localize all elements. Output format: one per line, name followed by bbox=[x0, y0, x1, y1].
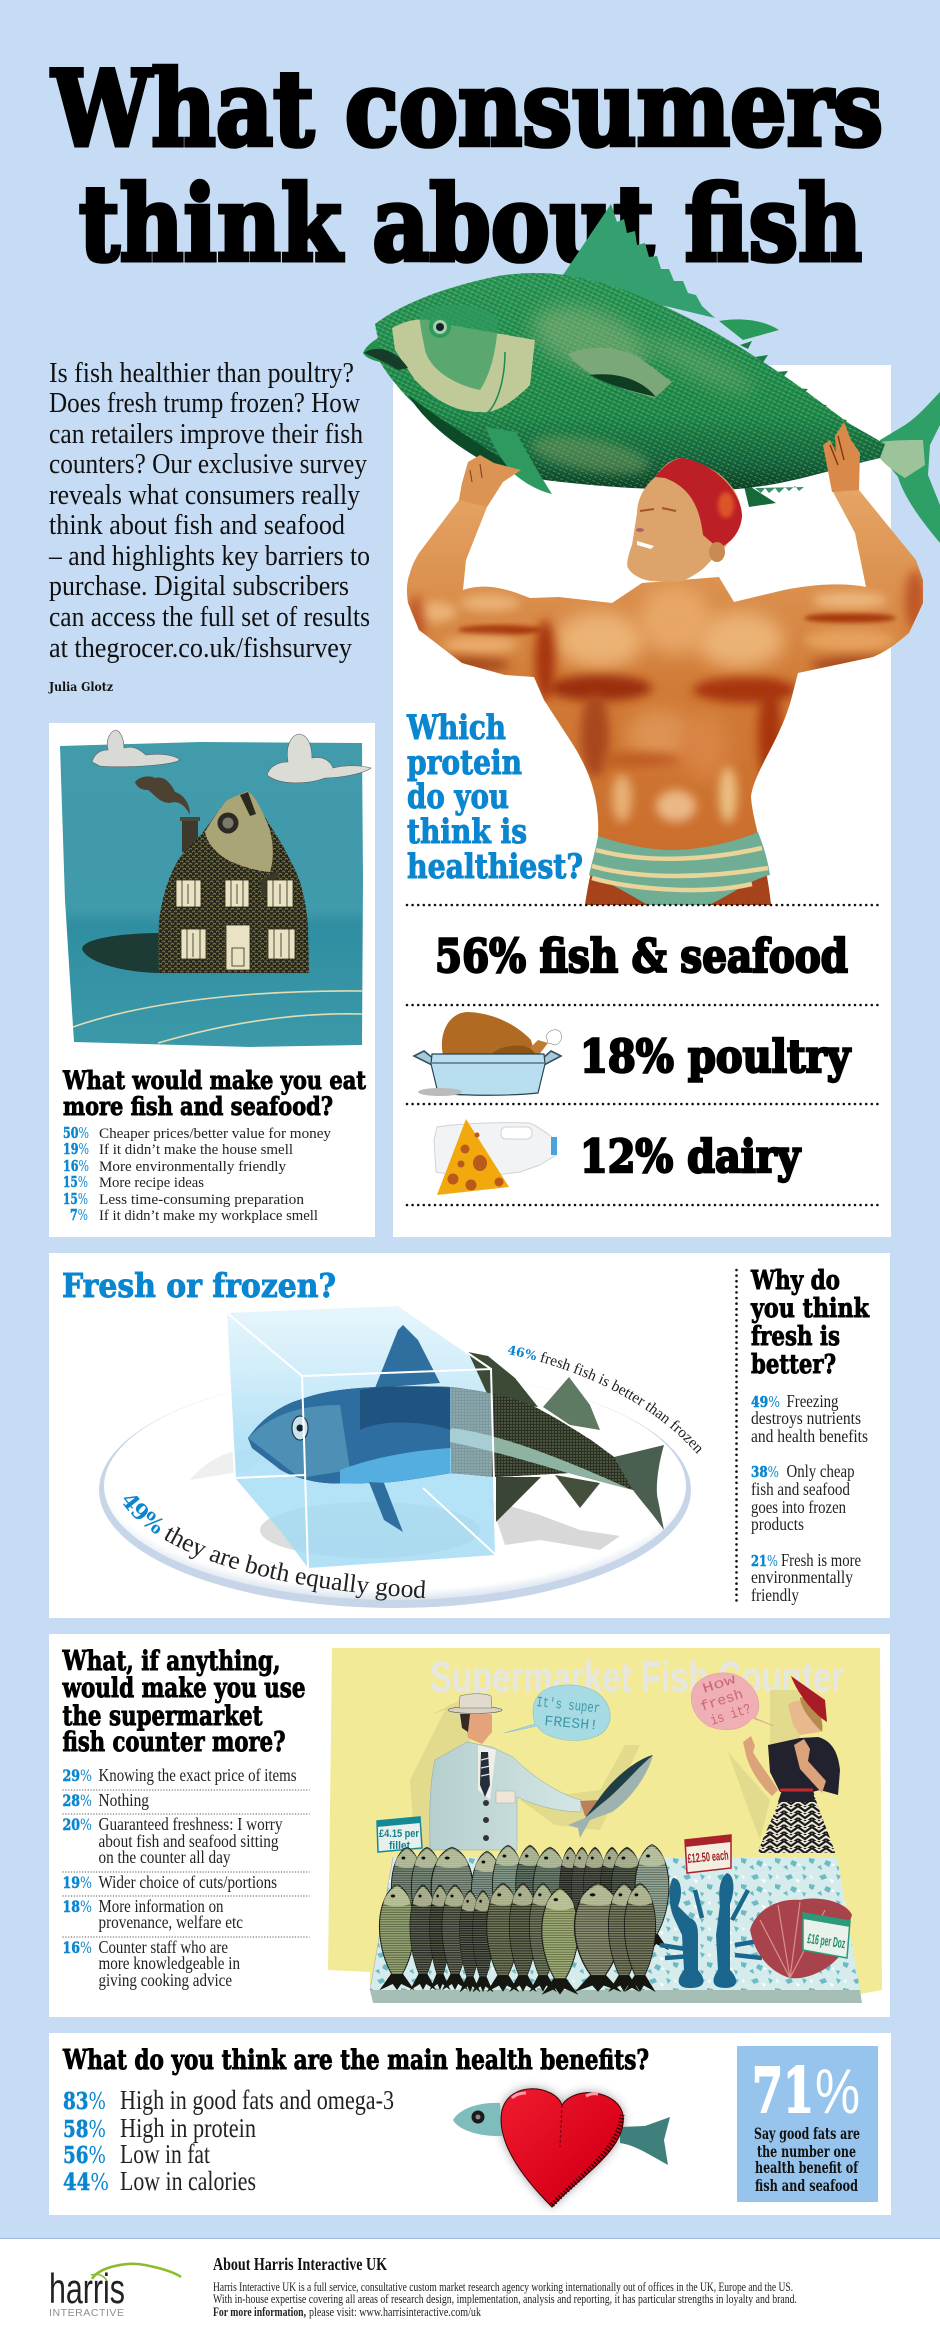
list: health benefits: Low in fat bbox=[120, 2139, 210, 2169]
text: about Harris: With in-house expertise covering all areas of research design, implementation, analysis and reporting, it has particular strengths in loyalty and brand. bbox=[213, 2292, 797, 2306]
list: why fresh is better: 49% bbox=[751, 1393, 780, 1411]
heading: fish counter: would make you use bbox=[62, 1673, 306, 1704]
callout: 71%: 71 bbox=[752, 2054, 814, 2127]
heading: why fresh better bbox=[750, 1265, 870, 1380]
heading: which protein: Which bbox=[406, 708, 506, 748]
list: why fresh is better: friendly bbox=[751, 1585, 799, 1605]
list: reasons to eat more: 16% bbox=[63, 1157, 89, 1175]
heading: health benefits: What do you think are the main health benefits? bbox=[62, 2045, 649, 2076]
illustration: plate with fish in ice bbox=[99, 1305, 691, 1608]
ice tray bbox=[370, 1857, 862, 2003]
list: reasons to eat more bbox=[63, 1124, 331, 1224]
heading: which protein: do you bbox=[407, 777, 509, 817]
heading: about Harris: About Harris Interactive UK bbox=[213, 2254, 387, 2274]
list: why fresh is better: Only cheap bbox=[786, 1461, 855, 1481]
list: fish counter answers: provenance, welfare etc bbox=[98, 1912, 243, 1932]
speech bubble: shopper: fresh bbox=[699, 1687, 745, 1716]
dotted divider bbox=[735, 1270, 738, 1602]
price tag: fillet bbox=[377, 1817, 422, 1852]
list: fish counter answers: giving cooking advice bbox=[98, 1970, 232, 1990]
heading: fish counter: What, if anything, bbox=[62, 1646, 281, 1677]
logo: Harris Interactive: harris bbox=[49, 2265, 125, 2312]
logo: Harris Interactive: INTERACTIVE bbox=[49, 2307, 124, 2319]
list: reasons to eat more: Less time-consuming preparation bbox=[99, 1192, 305, 1208]
list: health benefits: 56% bbox=[63, 2142, 106, 2169]
fin: dorsal bbox=[563, 204, 715, 318]
list: why fresh is better: 21% bbox=[751, 1552, 778, 1570]
illustration: fish house bbox=[60, 730, 371, 1047]
panel: eat more fish bbox=[49, 723, 375, 1237]
heading: fish counter bbox=[62, 1646, 306, 1758]
speech bubble: shopper: is it? bbox=[709, 1702, 753, 1730]
heading: why fresh better: better? bbox=[751, 1349, 836, 1380]
illustration: fish counter scene bbox=[328, 1648, 882, 2003]
intro text: Is fish healthier than poultry? bbox=[49, 358, 354, 389]
stat: fish and seafood: 56% fish & seafood bbox=[435, 929, 848, 983]
list: fish counter answers: 20% bbox=[62, 1815, 92, 1834]
list: why fresh is better bbox=[751, 1391, 868, 1605]
panel: health benefits bbox=[49, 2033, 891, 2215]
list: fish counter answers: Knowing the exact price of items bbox=[98, 1765, 297, 1785]
list: health benefits: High in good fats and omega-3 bbox=[120, 2085, 394, 2115]
illustration: man head and hands bbox=[459, 422, 860, 582]
heading: eat more fish bbox=[62, 1066, 366, 1121]
heading: fish counter: the supermarket bbox=[62, 1701, 263, 1732]
list: reasons to eat more: 50% bbox=[63, 1124, 89, 1142]
list: fish counter answers: 18% bbox=[62, 1897, 92, 1916]
fish body bbox=[248, 1386, 633, 1490]
footer bbox=[0, 2238, 940, 2346]
list: reasons to eat more: More environmentally friendly bbox=[99, 1159, 287, 1175]
clouds bbox=[92, 730, 180, 767]
hand: left bbox=[459, 455, 521, 507]
intro text: – and highlights key barriers to bbox=[48, 541, 370, 572]
byline: Julia Glotz bbox=[48, 680, 113, 694]
list: fish counter answers: 16% bbox=[62, 1938, 92, 1957]
hair bbox=[655, 458, 742, 548]
heading: which protein: protein bbox=[407, 743, 522, 783]
curved label: fresh better: 46% fresh fish is better than frozen bbox=[508, 1346, 702, 1454]
list: health benefits bbox=[63, 2085, 394, 2196]
list: why fresh is better: 38% bbox=[751, 1463, 779, 1481]
list: fish counter answers: 28% bbox=[62, 1791, 92, 1810]
head plate bbox=[392, 320, 535, 412]
text: about Harris bbox=[213, 2280, 797, 2319]
ice cube front lines bbox=[226, 1305, 496, 1568]
speech bubble: salesman: FRESH! bbox=[544, 1714, 599, 1735]
fin: lower pectoral bbox=[486, 427, 552, 494]
swim trunks bbox=[589, 832, 770, 905]
heading: why fresh better: fresh is bbox=[751, 1321, 840, 1352]
intro text bbox=[48, 358, 370, 664]
list: why fresh is better: fish and seafood bbox=[751, 1479, 850, 1499]
icon: milk jug and cheese bbox=[434, 1119, 557, 1195]
list: fish counter answers: about fish and seafood sitting bbox=[98, 1831, 279, 1851]
shopper bbox=[743, 1676, 840, 1853]
logo: Harris Interactive bbox=[49, 2264, 181, 2319]
smoke bbox=[135, 776, 190, 815]
intro text: reveals what consumers really bbox=[49, 480, 360, 511]
intro text: at thegrocer.co.uk/fishsurvey bbox=[49, 633, 352, 664]
intro text: can retailers improve their fish bbox=[49, 419, 363, 450]
held fish bbox=[568, 1755, 653, 1838]
price tag: fillet: fillet bbox=[389, 1840, 410, 1852]
heading: why fresh better: you think bbox=[750, 1293, 870, 1324]
price tag: fillet: £4.15 per bbox=[379, 1828, 420, 1840]
list: why fresh is better: Fresh is more bbox=[781, 1550, 861, 1570]
list: fish counter answers: 29% bbox=[62, 1766, 92, 1785]
list: health benefits: 44% bbox=[63, 2169, 109, 2196]
fin: pectoral bbox=[568, 348, 672, 398]
list: health benefits: 83% bbox=[63, 2088, 106, 2115]
price tag: per dozen bbox=[803, 1913, 850, 1958]
list: reasons to eat more: If it didn’t make the house smell bbox=[99, 1142, 293, 1158]
illustration: green tuna bbox=[363, 204, 940, 543]
list: why fresh is better: environmentally bbox=[751, 1567, 853, 1587]
heading: eat more fish: more fish and seafood? bbox=[63, 1092, 333, 1121]
list: why fresh is better: products bbox=[751, 1514, 804, 1534]
heading: which protein bbox=[406, 708, 583, 887]
list: fish counter answers bbox=[62, 1765, 310, 1990]
list: reasons to eat more: Cheaper prices/better value for money bbox=[99, 1126, 331, 1142]
list: why fresh is better: destroys nutrients bbox=[751, 1408, 861, 1428]
speech bubble: shopper bbox=[691, 1672, 774, 1730]
list: fish counter answers: Wider choice of cuts/portions bbox=[98, 1872, 277, 1892]
list: why fresh is better: goes into frozen bbox=[751, 1497, 846, 1517]
title bbox=[51, 47, 883, 285]
panel: supermarket fish counter bbox=[49, 1634, 890, 2017]
head bbox=[627, 458, 742, 582]
scallops bbox=[750, 1899, 852, 1978]
callout: 71% bbox=[737, 2046, 878, 2202]
heading: why fresh better: Why do bbox=[750, 1265, 840, 1296]
speech bubble: salesman: It's super bbox=[535, 1695, 601, 1718]
stat: poultry: 18% poultry bbox=[580, 1030, 852, 1083]
intro text: Does fresh trump frozen? How bbox=[49, 388, 361, 419]
panel: healthiest protein bbox=[393, 365, 925, 1237]
shadow bbox=[82, 933, 160, 973]
list: health benefits: Low in calories bbox=[120, 2166, 256, 2196]
callout: 71%: the number one bbox=[757, 2142, 856, 2161]
text: about Harris: For more information, bbox=[213, 2305, 306, 2319]
heading: which protein: healthiest? bbox=[407, 847, 583, 887]
list: fish counter answers: more knowledgeable in bbox=[98, 1953, 240, 1973]
list: fish counter answers: More information on bbox=[98, 1896, 224, 1916]
heading: fish counter: fish counter more? bbox=[62, 1727, 286, 1758]
speech bubble: salesman bbox=[504, 1685, 610, 1740]
callout: 71%: fish and seafood bbox=[755, 2176, 858, 2195]
hand: right bbox=[823, 422, 860, 492]
wall shadows bbox=[410, 1690, 800, 1850]
chimney bbox=[182, 818, 198, 852]
dotted rules bbox=[407, 905, 878, 1205]
heading: which protein: think is bbox=[407, 812, 527, 852]
heading: eat more fish: What would make you eat bbox=[62, 1066, 366, 1095]
price tag: each: £12.50 each bbox=[687, 1847, 729, 1866]
list: fish counter answers: Nothing bbox=[98, 1790, 149, 1810]
list: why fresh is better: Freezing bbox=[786, 1391, 839, 1411]
list: reasons to eat more: 19% bbox=[63, 1140, 89, 1158]
callout: 71%: health benefit of bbox=[755, 2158, 859, 2177]
callout: 71%: % bbox=[815, 2057, 860, 2127]
list: reasons to eat more: 15% bbox=[63, 1190, 88, 1208]
icon: roast poultry in dish bbox=[414, 1012, 562, 1096]
fish display bbox=[379, 1845, 669, 1994]
ice cube back bbox=[226, 1305, 496, 1568]
intro text: can access the full set of results bbox=[49, 602, 370, 633]
price tag: each bbox=[685, 1835, 731, 1873]
callout: 71%: Say good fats are bbox=[754, 2124, 860, 2143]
windows bbox=[176, 880, 295, 970]
list: fish counter answers: Guaranteed freshness: I worry bbox=[98, 1814, 283, 1834]
illustration: muscle man body bbox=[407, 483, 925, 910]
lobsters bbox=[660, 1873, 765, 1988]
illustration: heart fish bbox=[453, 2089, 670, 2207]
list: health benefits: 58% bbox=[63, 2116, 106, 2143]
stat: dairy: 12% dairy bbox=[580, 1130, 802, 1183]
list: reasons to eat more: More recipe ideas bbox=[99, 1175, 204, 1191]
list: reasons to eat more: 7% bbox=[70, 1206, 88, 1224]
fish fins bbox=[375, 1325, 440, 1388]
list: fish counter answers: 19% bbox=[62, 1873, 92, 1892]
face detail bbox=[640, 508, 676, 511]
intro text: counters? Our exclusive survey bbox=[49, 449, 367, 480]
speech bubble: shopper: How bbox=[701, 1672, 739, 1698]
intro text: purchase. Digital subscribers bbox=[49, 571, 349, 602]
panel: fresh or frozen bbox=[49, 1253, 890, 1618]
list: reasons to eat more: 15% bbox=[63, 1173, 88, 1191]
curved label: equally good: 49% they are both equally good bbox=[123, 1496, 426, 1600]
salesman bbox=[430, 1694, 602, 1850]
intro text: think about fish and seafood bbox=[49, 510, 345, 541]
price tag: per dozen: £16 per Doz bbox=[807, 1930, 846, 1951]
list: fish counter answers: Counter staff who are bbox=[98, 1937, 228, 1957]
text: about Harris: please visit: www.harrisinteractive.com/uk bbox=[309, 2305, 482, 2319]
heading: fresh or frozen: Fresh or frozen? bbox=[62, 1266, 336, 1305]
house body bbox=[158, 791, 309, 973]
list: fish counter answers: on the counter all day bbox=[98, 1847, 231, 1867]
list: health benefits: High in protein bbox=[120, 2113, 256, 2143]
list: why fresh is better: and health benefits bbox=[751, 1426, 868, 1446]
list: reasons to eat more: If it didn’t make my workplace smell bbox=[99, 1208, 318, 1224]
